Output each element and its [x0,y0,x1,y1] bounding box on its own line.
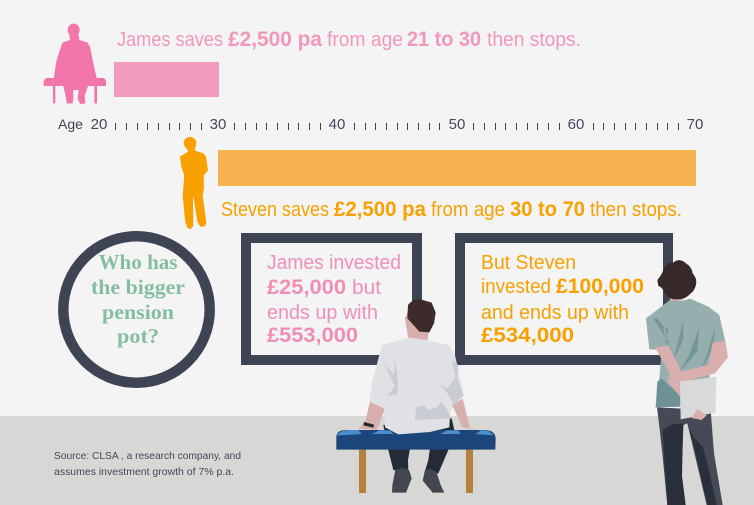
James result text: ends up with [267,302,378,324]
illustration: standing man with paper [646,260,728,505]
heading: James [117,28,581,51]
age timeline [58,116,703,133]
source note: Source: CLSA , a research company, and [54,450,241,462]
Steven result text: £534,000 [481,324,574,347]
shirt folds [653,318,715,373]
question text: pension [102,300,174,324]
axis numbers: 70 [687,116,703,133]
icon: James seated silhouette [44,24,106,104]
question text: the bigger [91,275,185,299]
shirt folds [385,357,398,395]
icon: Steven standing silhouette [180,137,208,229]
heading: Steven: from age [431,199,505,221]
hair [657,260,696,299]
James result text: £25,000 [267,276,346,299]
heading: James: from age [327,29,403,51]
bar: James saving period [114,62,219,97]
axis numbers: 30 [210,116,226,133]
heading: Steven: then stops. [590,199,682,221]
bench legs [359,448,366,493]
source note: assumes investment growth of 7% p.a. [54,466,234,478]
shirt [369,338,464,434]
arms [359,402,386,430]
Steven result text: and ends up with [481,302,629,324]
axis numbers: 60 [568,116,584,133]
question text: Who has [98,250,178,274]
watch [363,422,374,428]
Steven result text [481,252,644,347]
panel: question circle [63,236,210,383]
illustration: seated man on bench [336,299,496,493]
heading: James: then stops. [487,29,581,51]
heading: James: 21 to 30 [407,28,481,51]
panel: James frame [246,238,417,360]
hand [692,409,707,420]
axis numbers: 40 [329,116,345,133]
axis numbers: 50 [449,116,465,133]
source note [54,450,241,478]
shoes [392,468,412,493]
Steven result text: £100,000 [556,275,644,298]
heading: James: £2,500 pa [228,28,322,51]
James result text: James invested [267,252,401,274]
shirt [646,299,725,407]
heading: Steven: 30 to 70 [510,198,585,221]
hair [407,299,436,332]
Steven result text: But Steven [481,252,576,274]
James result text: but [352,277,381,299]
panel: Steven frame [460,238,668,360]
question text: pot? [117,324,159,348]
heading: Steven: Steven saves [221,199,329,221]
heading: Steven [221,198,682,221]
heading: James: James saves [117,29,223,51]
trousers [383,418,454,473]
neck [405,310,430,342]
Steven result text: invested [481,276,551,298]
axis numbers [91,116,703,133]
neck [670,293,683,303]
arms [655,341,728,397]
bench seat [336,430,496,450]
heading: Steven: £2,500 pa [334,198,426,221]
James result text: £553,000 [267,324,358,347]
trousers [657,407,723,505]
question text [91,250,185,348]
axis label: Age: Age [58,116,83,132]
axis numbers: 20 [91,116,107,133]
floor [0,416,754,505]
James result text [267,252,401,347]
bar: Steven saving period [218,150,696,186]
paper [680,377,716,419]
